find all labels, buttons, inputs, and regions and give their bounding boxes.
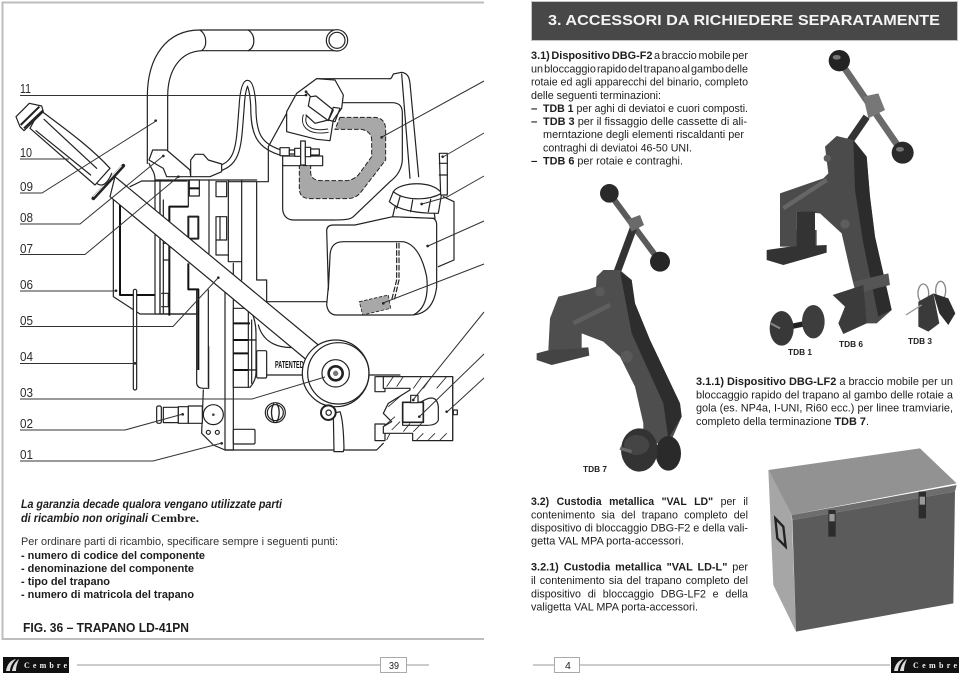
- part number callouts: [20, 81, 484, 462]
- lower body: [197, 290, 383, 450]
- callout 09: 09: [20, 179, 33, 194]
- feed arm: [110, 177, 318, 360]
- photo: DBG-F2 device: [767, 50, 914, 323]
- sectioned head block: [370, 375, 457, 441]
- text: section 3.1: delle seguenti terminazioni:: [531, 90, 661, 102]
- text: section 3.2.1: 3.2.1) Custodia metallica "VAL LD-L" per: [531, 562, 748, 574]
- page number 39: [380, 658, 406, 672]
- text: section 3.2: getta VAL MPA porta-accessori.: [531, 535, 684, 547]
- label TDB 1: TDB 1: [788, 347, 812, 357]
- text: section 3.1: –: [531, 156, 537, 168]
- footer: right page: [533, 657, 959, 673]
- motor internals: [113, 150, 257, 390]
- text: section 3.1.1: 3.1.1) Dispositivo DBG-LF2 a braccio mobile per un: [696, 376, 953, 388]
- text: section 3.2.1: valigetta VAL MPA porta-accessori.: [531, 601, 698, 613]
- callout 10: [20, 145, 69, 160]
- manufacturer mark: [265, 403, 285, 423]
- panel: left page frame: [2, 2, 484, 639]
- Cembre logo right: Cembre: [913, 661, 957, 670]
- motor housing: [229, 72, 419, 302]
- page number 39: 39: [389, 660, 399, 672]
- lubrication nozzle: [287, 79, 343, 141]
- grey seal gasket: [299, 117, 386, 199]
- photo: DBG-LF2 device: [537, 184, 682, 472]
- side grip handle: [16, 103, 123, 198]
- warranty note: La garanzia decade qualora vengano utilizzate parti: [21, 497, 283, 511]
- text: section 3.1: TDB 6 per rotaie e contraghi.: [543, 156, 683, 168]
- callout 06: 06: [20, 277, 33, 292]
- text: section 3.1: [531, 50, 748, 168]
- callout 11: 11: [20, 81, 31, 96]
- callout 08: [20, 156, 163, 225]
- text: section 3.2: 3.2) Custodia metallica "VAL LD" per il: [531, 496, 748, 508]
- callout 05: 05: [20, 313, 33, 328]
- icon: TDB 3 termination: [906, 281, 955, 332]
- photo: metal case: [768, 448, 957, 632]
- label TDB 6: TDB 6: [839, 339, 863, 349]
- spare parts ordering instructions: - denominazione del componente: [21, 563, 194, 575]
- text: section 3.2.1: il contenimento sia del trapano completo del: [531, 575, 748, 587]
- text: section 3.2: contenimento sia del trapano completo del: [531, 509, 748, 521]
- text: section 3.1: contraghi di deviatoi 46-50 UNI.: [543, 142, 692, 154]
- oil tank and cap: [327, 153, 454, 315]
- text: section 3.1.1: [696, 376, 954, 428]
- callout 02: [20, 414, 183, 431]
- spare parts ordering instructions: - tipo del trapano: [21, 576, 110, 588]
- text: section 3.1: merntazione degli elementi riscaldanti per: [543, 129, 744, 141]
- spare parts ordering instructions: [21, 536, 338, 601]
- technical drawing: drill LD-41PN: [16, 30, 457, 452]
- pipe fitting bolts: [280, 141, 319, 165]
- callout 06: [20, 277, 116, 292]
- lever: [321, 405, 344, 452]
- footer: left page: [3, 657, 429, 673]
- text: section 3.1.1: bloccaggio rapido del trapano al gambo delle rotaie a: [696, 389, 954, 401]
- text: section 3.1: un bloccaggio rapido del trapano al gambo delle: [531, 64, 748, 76]
- hydraulic coupling: [157, 405, 223, 434]
- callout 08: 08: [20, 210, 33, 225]
- warranty note: [21, 497, 283, 525]
- warranty note: Cembre.: [151, 511, 199, 525]
- spare parts ordering instructions: - numero di matricola del trapano: [21, 589, 194, 601]
- label TDB 7: TDB 7: [583, 464, 607, 474]
- text: section 3.1.1: completo della terminazione TDB 7.: [696, 416, 869, 428]
- feed wheel hub: [302, 340, 369, 407]
- spare parts ordering instructions: - numero di codice del componente: [21, 550, 205, 562]
- callout 07: [20, 177, 178, 256]
- text: section 3.2.1: dispositivo di bloccaggio DBG-LF2 e della: [531, 588, 749, 600]
- icon: TDB 6 termination: [833, 285, 867, 334]
- text: section 3.2.1: [531, 562, 749, 613]
- text: section 3.1: –: [531, 116, 537, 128]
- text: section 3.1: TDB 1 per aghi di deviatoi e cuori composti.: [543, 103, 748, 115]
- header bar: 3. ACCESSORI DA RICHIEDERE SEPARATAMENTE: [548, 13, 940, 29]
- icon: TDB 1 termination: [770, 305, 825, 346]
- text: section 3.2: dispositivo di bloccaggio DBG-F2 e della vali-: [531, 523, 748, 535]
- figure caption: FIG. 36 – TRAPANO LD-41PN: [23, 621, 189, 635]
- callout 01: 01: [20, 447, 33, 462]
- callout 10: 10: [20, 145, 32, 160]
- callout 01: [20, 443, 222, 462]
- callout 03: 03: [20, 385, 33, 400]
- page number 4: 4: [565, 660, 571, 672]
- photo: terminations TDB 1, TDB 6, TDB 3: [770, 281, 955, 346]
- Cembre logo left: Cembre: [24, 661, 67, 670]
- text: section 3.1: TDB 3 per il fissaggio delle cassette di ali-: [543, 116, 747, 128]
- callout 04: 04: [20, 349, 33, 364]
- right side leaders: [382, 81, 484, 417]
- patent mark: PATENTED: [275, 360, 304, 371]
- callout 03: [20, 377, 325, 400]
- label TDB 3: TDB 3: [908, 336, 932, 346]
- header bar: [532, 2, 958, 40]
- page number 4: [554, 658, 580, 672]
- callout 02: 02: [20, 416, 33, 431]
- text: section 3.1: –: [531, 103, 537, 115]
- spare parts ordering instructions: Per ordinare parti di ricambio, specificare sempre i seguenti punti:: [21, 536, 338, 548]
- leader dots: [115, 94, 448, 445]
- warranty note: di ricambio non originali: [21, 511, 149, 525]
- text: section 3.2: [531, 496, 748, 547]
- Cembre logo left: [3, 657, 69, 673]
- carrying handle: [147, 30, 348, 163]
- callout 04: [20, 349, 135, 364]
- callout 05: [20, 278, 218, 328]
- callout 09: [20, 121, 156, 194]
- text: section 3.1.1: gola (es. NP4a, I-UNI, Ri60 ecc.) per linee tramviarie,: [696, 403, 953, 415]
- text: section 3.1: rotaie ed agli apparecchi del binario, completo: [531, 76, 748, 88]
- Cembre logo right: [891, 657, 959, 673]
- flexible pipe: [213, 83, 283, 170]
- text: section 3.1: 3.1) Dispositivo DBG-F2 a braccio mobile per: [531, 50, 748, 62]
- callout 07: 07: [20, 241, 33, 256]
